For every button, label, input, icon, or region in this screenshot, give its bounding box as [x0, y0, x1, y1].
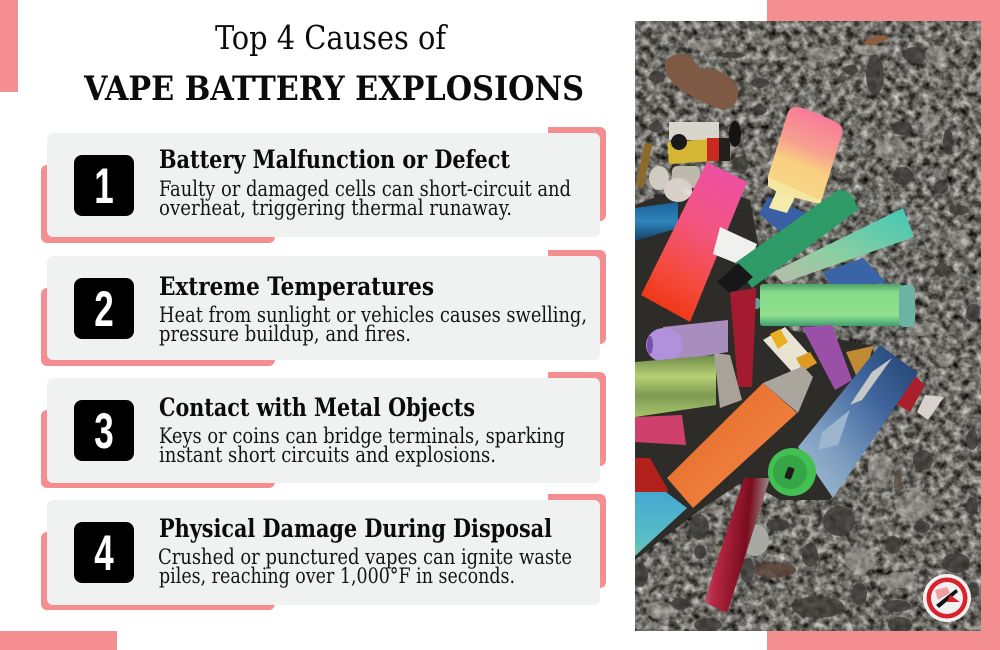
vape: purple stick [802, 325, 852, 390]
card accents [41, 494, 606, 610]
vape: red clear stick [704, 478, 770, 613]
description [158, 545, 572, 589]
description: Crushed or punctured vapes can ignite waste [158, 545, 572, 570]
vape: keys and white fragments [636, 142, 700, 202]
vape: white cylinder [713, 227, 757, 263]
panel: cause 4 [41, 494, 606, 610]
vape: peach mouthpiece device [768, 107, 842, 213]
card accents [41, 127, 606, 243]
number badge 3: 3 [94, 404, 114, 460]
vape: red crushed can [887, 350, 944, 420]
vape: yellow and white battery [763, 327, 817, 373]
card accents [41, 250, 606, 366]
vape: crimson tube [730, 288, 756, 387]
title [83, 18, 584, 109]
panel: cause 2 [41, 250, 606, 366]
description: instant short circuits and explosions. [159, 443, 496, 468]
accent: top-left bar [0, 0, 18, 92]
description [159, 424, 565, 468]
accent: bottom-left bar [0, 631, 117, 650]
photo: discarded vapes on gravel [632, 21, 981, 633]
rust stain [665, 54, 738, 110]
vape: grey disc [746, 524, 769, 556]
number badge 4: 4 [94, 526, 114, 582]
title line 2: VAPE BATTERY EXPLOSIONS [83, 69, 584, 109]
number badge 2: 2 [94, 282, 114, 338]
vape: clear orange device [667, 366, 813, 508]
vape: scratched blue flat device [798, 345, 918, 498]
heading: Contact with Metal Objects [159, 393, 475, 422]
logo badge [923, 574, 971, 622]
description [159, 303, 587, 347]
vape: blue tube under teal [823, 258, 887, 286]
description: Heat from sunlight or vehicles causes swelling, [159, 303, 587, 328]
title line 1: Top 4 Causes of [215, 18, 448, 57]
vape: green stick [717, 190, 858, 295]
vape: battery cell with wires [667, 121, 741, 164]
number badge 1: 1 [94, 159, 114, 215]
vape: cyan gradient [635, 492, 687, 556]
number badge 4 [74, 522, 134, 583]
description: Faulty or damaged cells can short-circuit and [159, 177, 571, 202]
accent: right frame [767, 0, 1000, 650]
description: overheat, triggering thermal runaway. [159, 196, 512, 221]
card background [47, 378, 600, 483]
vape: pink crushed tube [635, 415, 686, 445]
vape: holographic green device [635, 353, 742, 417]
vape: blue tube left [635, 202, 678, 241]
card background [47, 133, 600, 237]
heading: Battery Malfunction or Defect [159, 145, 511, 174]
vape: red and black end [635, 458, 668, 493]
vape: light green device [755, 284, 915, 327]
panel: cause 1 [41, 127, 606, 243]
vape: pink-orange gradient [641, 162, 747, 322]
vape: blue tube under mouthpiece [759, 197, 807, 233]
description [159, 177, 571, 221]
card background [47, 256, 600, 360]
number badge 2 [74, 278, 134, 339]
gravel ground [632, 21, 981, 633]
description: piles, reaching over 1,000°F in seconds. [159, 564, 515, 589]
number badge 1 [74, 155, 134, 216]
description: Keys or coins can bridge terminals, sparking [159, 424, 565, 449]
vape: teal silver gradient [773, 208, 914, 283]
heading: Physical Damage During Disposal [159, 514, 552, 543]
vape: orange foil scrap [846, 346, 873, 375]
heading: Extreme Temperatures [159, 272, 434, 301]
number badge 3 [74, 400, 134, 461]
vape: lilac device [646, 320, 728, 363]
card accents [41, 372, 606, 488]
vape: green round cap [768, 448, 816, 496]
description: pressure buildup, and fires. [159, 322, 411, 347]
shadowed pile base [635, 180, 900, 560]
panel: cause 3 [41, 372, 606, 488]
card background [47, 500, 600, 605]
